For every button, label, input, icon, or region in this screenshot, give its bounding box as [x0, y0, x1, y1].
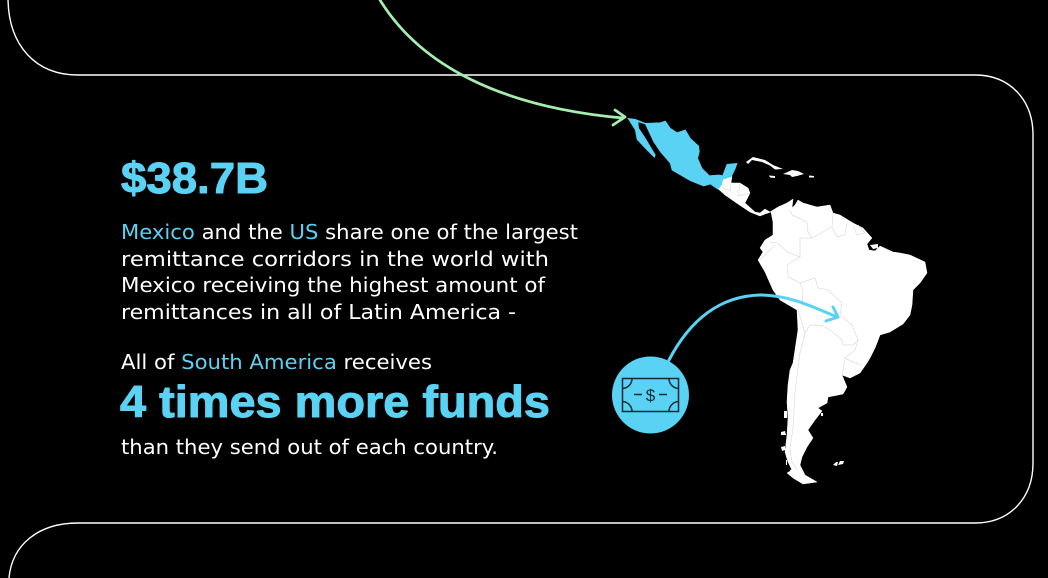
- map: Cuba: [746, 157, 783, 170]
- map: Jamaica: [769, 176, 775, 178]
- map: Amazon delta island: [870, 244, 878, 249]
- heading: $38.7B: $38.7B: [121, 155, 268, 203]
- map: Hispaniola: [783, 170, 804, 177]
- arrow: green curve to Mexico: [380, 0, 625, 125]
- map: Puerto Rico: [809, 176, 814, 178]
- text block: Mexico and US corridor: Mexico and the US share one of the largest: [121, 220, 578, 244]
- map: southern Chile islands: [781, 411, 823, 474]
- text block: Mexico and US corridor: remittances in all of Latin America -: [121, 300, 516, 324]
- icon: money bill in circle: [612, 356, 689, 434]
- text: South America intro: All of South America receives: [121, 350, 432, 374]
- callout: 4 times more funds: 4 times more funds: [120, 378, 550, 427]
- text block: Mexico and US corridor: [121, 220, 578, 324]
- bill corners: [622, 378, 678, 412]
- dollar sign: $: [646, 386, 656, 405]
- text block: Mexico and US corridor: remittance corridors in the world with: [121, 247, 549, 271]
- map: country borders: [722, 183, 865, 470]
- map: Central and South America: [716, 176, 927, 484]
- map: Falkland Islands: [833, 461, 844, 466]
- icon background circle: [612, 356, 689, 434]
- map: Mexico: [628, 118, 737, 189]
- bill outline: [622, 378, 678, 412]
- text block: Mexico and US corridor: Mexico receiving the highest amount of: [121, 273, 546, 297]
- map: Latin America: [628, 118, 927, 484]
- arrow: blue curve to South America: [669, 295, 838, 360]
- text: closing line: than they send out of each country.: [121, 435, 498, 459]
